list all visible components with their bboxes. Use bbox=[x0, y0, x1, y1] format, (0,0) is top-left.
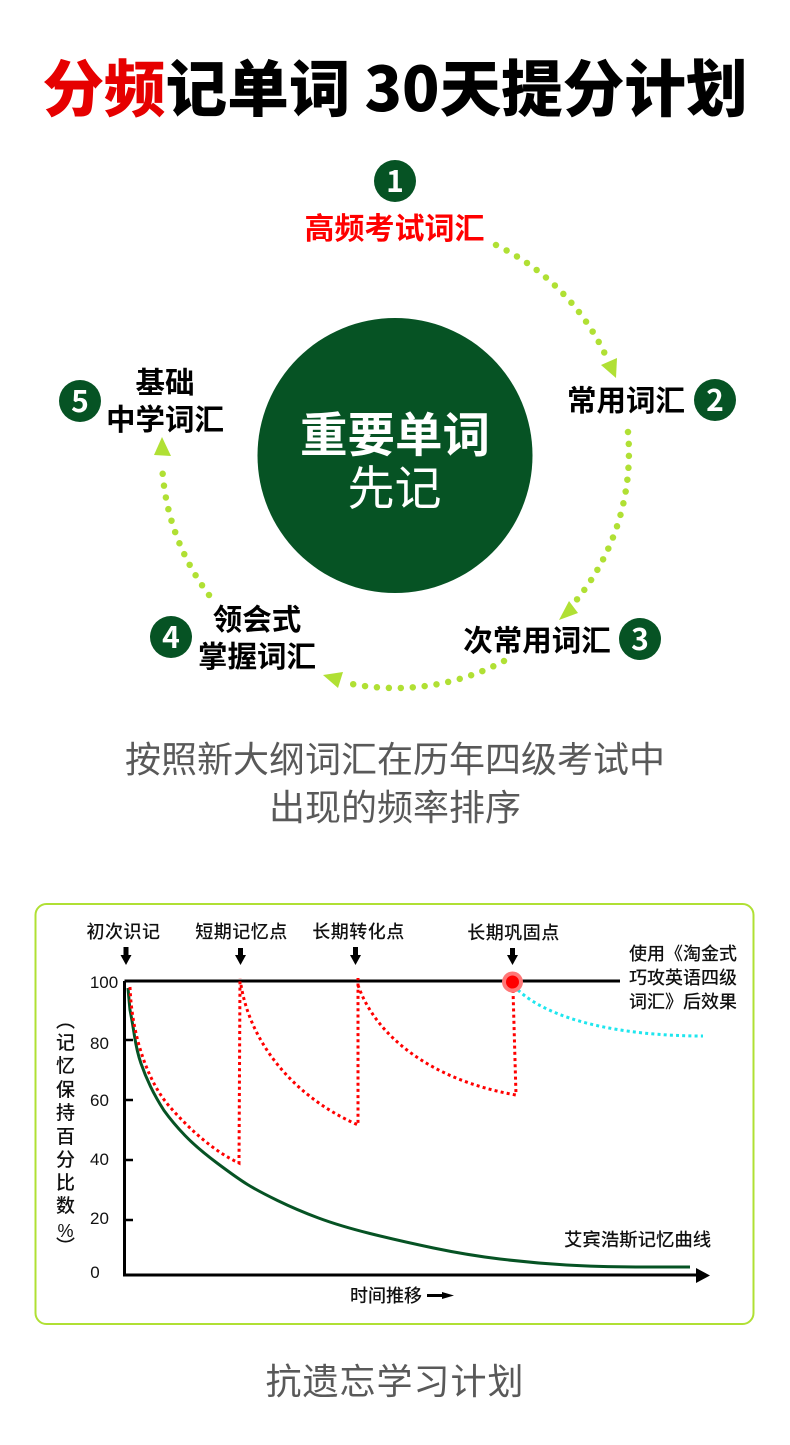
step 4: 掌握词汇 bbox=[198, 641, 316, 674]
center circle: 重要单词 bbox=[300, 410, 490, 463]
step 4 bbox=[150, 604, 316, 674]
consolidation point marker bbox=[502, 972, 523, 992]
arrow: step 4 to step 5 bbox=[154, 437, 209, 595]
callout: effect label bbox=[629, 944, 737, 1012]
callout: effect label: 使用《淘金式 bbox=[629, 944, 737, 964]
y axis title: 分 bbox=[56, 1149, 75, 1171]
y axis labels bbox=[90, 973, 118, 1282]
panel: forgetting curve chart bbox=[36, 904, 754, 1324]
curve label: 艾宾浩斯记忆曲线 bbox=[564, 1229, 711, 1250]
title: 分频记单词 30天提分计划 bbox=[42, 40, 748, 129]
step 1: 高频考试词汇 bbox=[304, 213, 484, 246]
y axis title: 百 bbox=[56, 1127, 75, 1148]
step 5: 中学词汇 bbox=[106, 404, 224, 437]
y axis title: 比 bbox=[56, 1172, 75, 1194]
milestone labels: 初次识记 bbox=[86, 922, 160, 942]
y axis labels: 100 bbox=[90, 973, 118, 992]
callout: effect label: 巧攻英语四级 bbox=[629, 968, 737, 988]
y axis title: ︵ bbox=[56, 1011, 75, 1032]
y axis labels: 40 bbox=[90, 1150, 109, 1169]
x axis label: 时间推移 bbox=[350, 1286, 422, 1306]
step 1: 1 bbox=[386, 157, 404, 201]
arrow: step 2 to step 3 bbox=[559, 432, 629, 620]
milestone labels: 长期巩固点 bbox=[467, 923, 560, 943]
milestone arrows bbox=[120, 947, 518, 965]
step 2: 2 bbox=[706, 376, 724, 420]
step 3: 3 bbox=[631, 615, 649, 659]
y axis title: 忆 bbox=[56, 1055, 75, 1077]
y axis title: 保 bbox=[56, 1079, 75, 1101]
y axis title: 记 bbox=[56, 1032, 75, 1054]
step 3 bbox=[463, 615, 661, 660]
step 2: 常用词汇 bbox=[567, 385, 685, 418]
step 4: 领会式 bbox=[213, 604, 301, 637]
y axis labels: 80 bbox=[90, 1034, 109, 1053]
step 1 bbox=[304, 157, 484, 246]
y axis labels: 20 bbox=[90, 1209, 109, 1228]
arrow: step 1 to step 2 bbox=[496, 245, 617, 378]
cyan improved curve bbox=[518, 990, 703, 1036]
y axis title: ︶ bbox=[56, 1236, 75, 1258]
y axis title: % bbox=[57, 1221, 74, 1241]
step 2 bbox=[567, 376, 736, 421]
cycle caption: 出现的频率排序 bbox=[269, 787, 521, 828]
step 4: 4 bbox=[162, 613, 180, 657]
bottom caption: 抗遗忘学习计划 bbox=[265, 1361, 525, 1402]
axes bbox=[124, 981, 710, 1283]
step 5 bbox=[59, 367, 224, 437]
cycle caption bbox=[125, 739, 665, 828]
milestone labels: 长期转化点 bbox=[312, 922, 405, 942]
y axis labels: 0 bbox=[90, 1263, 100, 1282]
x axis label bbox=[350, 1286, 454, 1306]
milestone labels bbox=[86, 922, 560, 943]
red review curves bbox=[130, 978, 516, 1163]
arrow: step 3 to step 4 bbox=[323, 661, 504, 688]
center circle bbox=[258, 318, 532, 593]
green forgetting curve bbox=[128, 988, 690, 1267]
step 5: 基础 bbox=[135, 367, 195, 400]
panel border bbox=[36, 904, 754, 1324]
y axis title: 数 bbox=[56, 1195, 75, 1217]
step 5: 5 bbox=[71, 377, 89, 421]
y axis title: 持 bbox=[56, 1102, 75, 1124]
y axis labels: 60 bbox=[90, 1091, 109, 1110]
milestone labels: 短期记忆点 bbox=[195, 922, 288, 942]
center circle: 先记 bbox=[348, 462, 442, 515]
cycle diagram bbox=[59, 157, 736, 688]
step 3: 次常用词汇 bbox=[463, 625, 611, 658]
callout: effect label: 词汇》后效果 bbox=[629, 992, 737, 1012]
y axis title bbox=[56, 1011, 75, 1258]
cycle caption: 按照新大纲词汇在历年四级考试中 bbox=[125, 739, 665, 780]
